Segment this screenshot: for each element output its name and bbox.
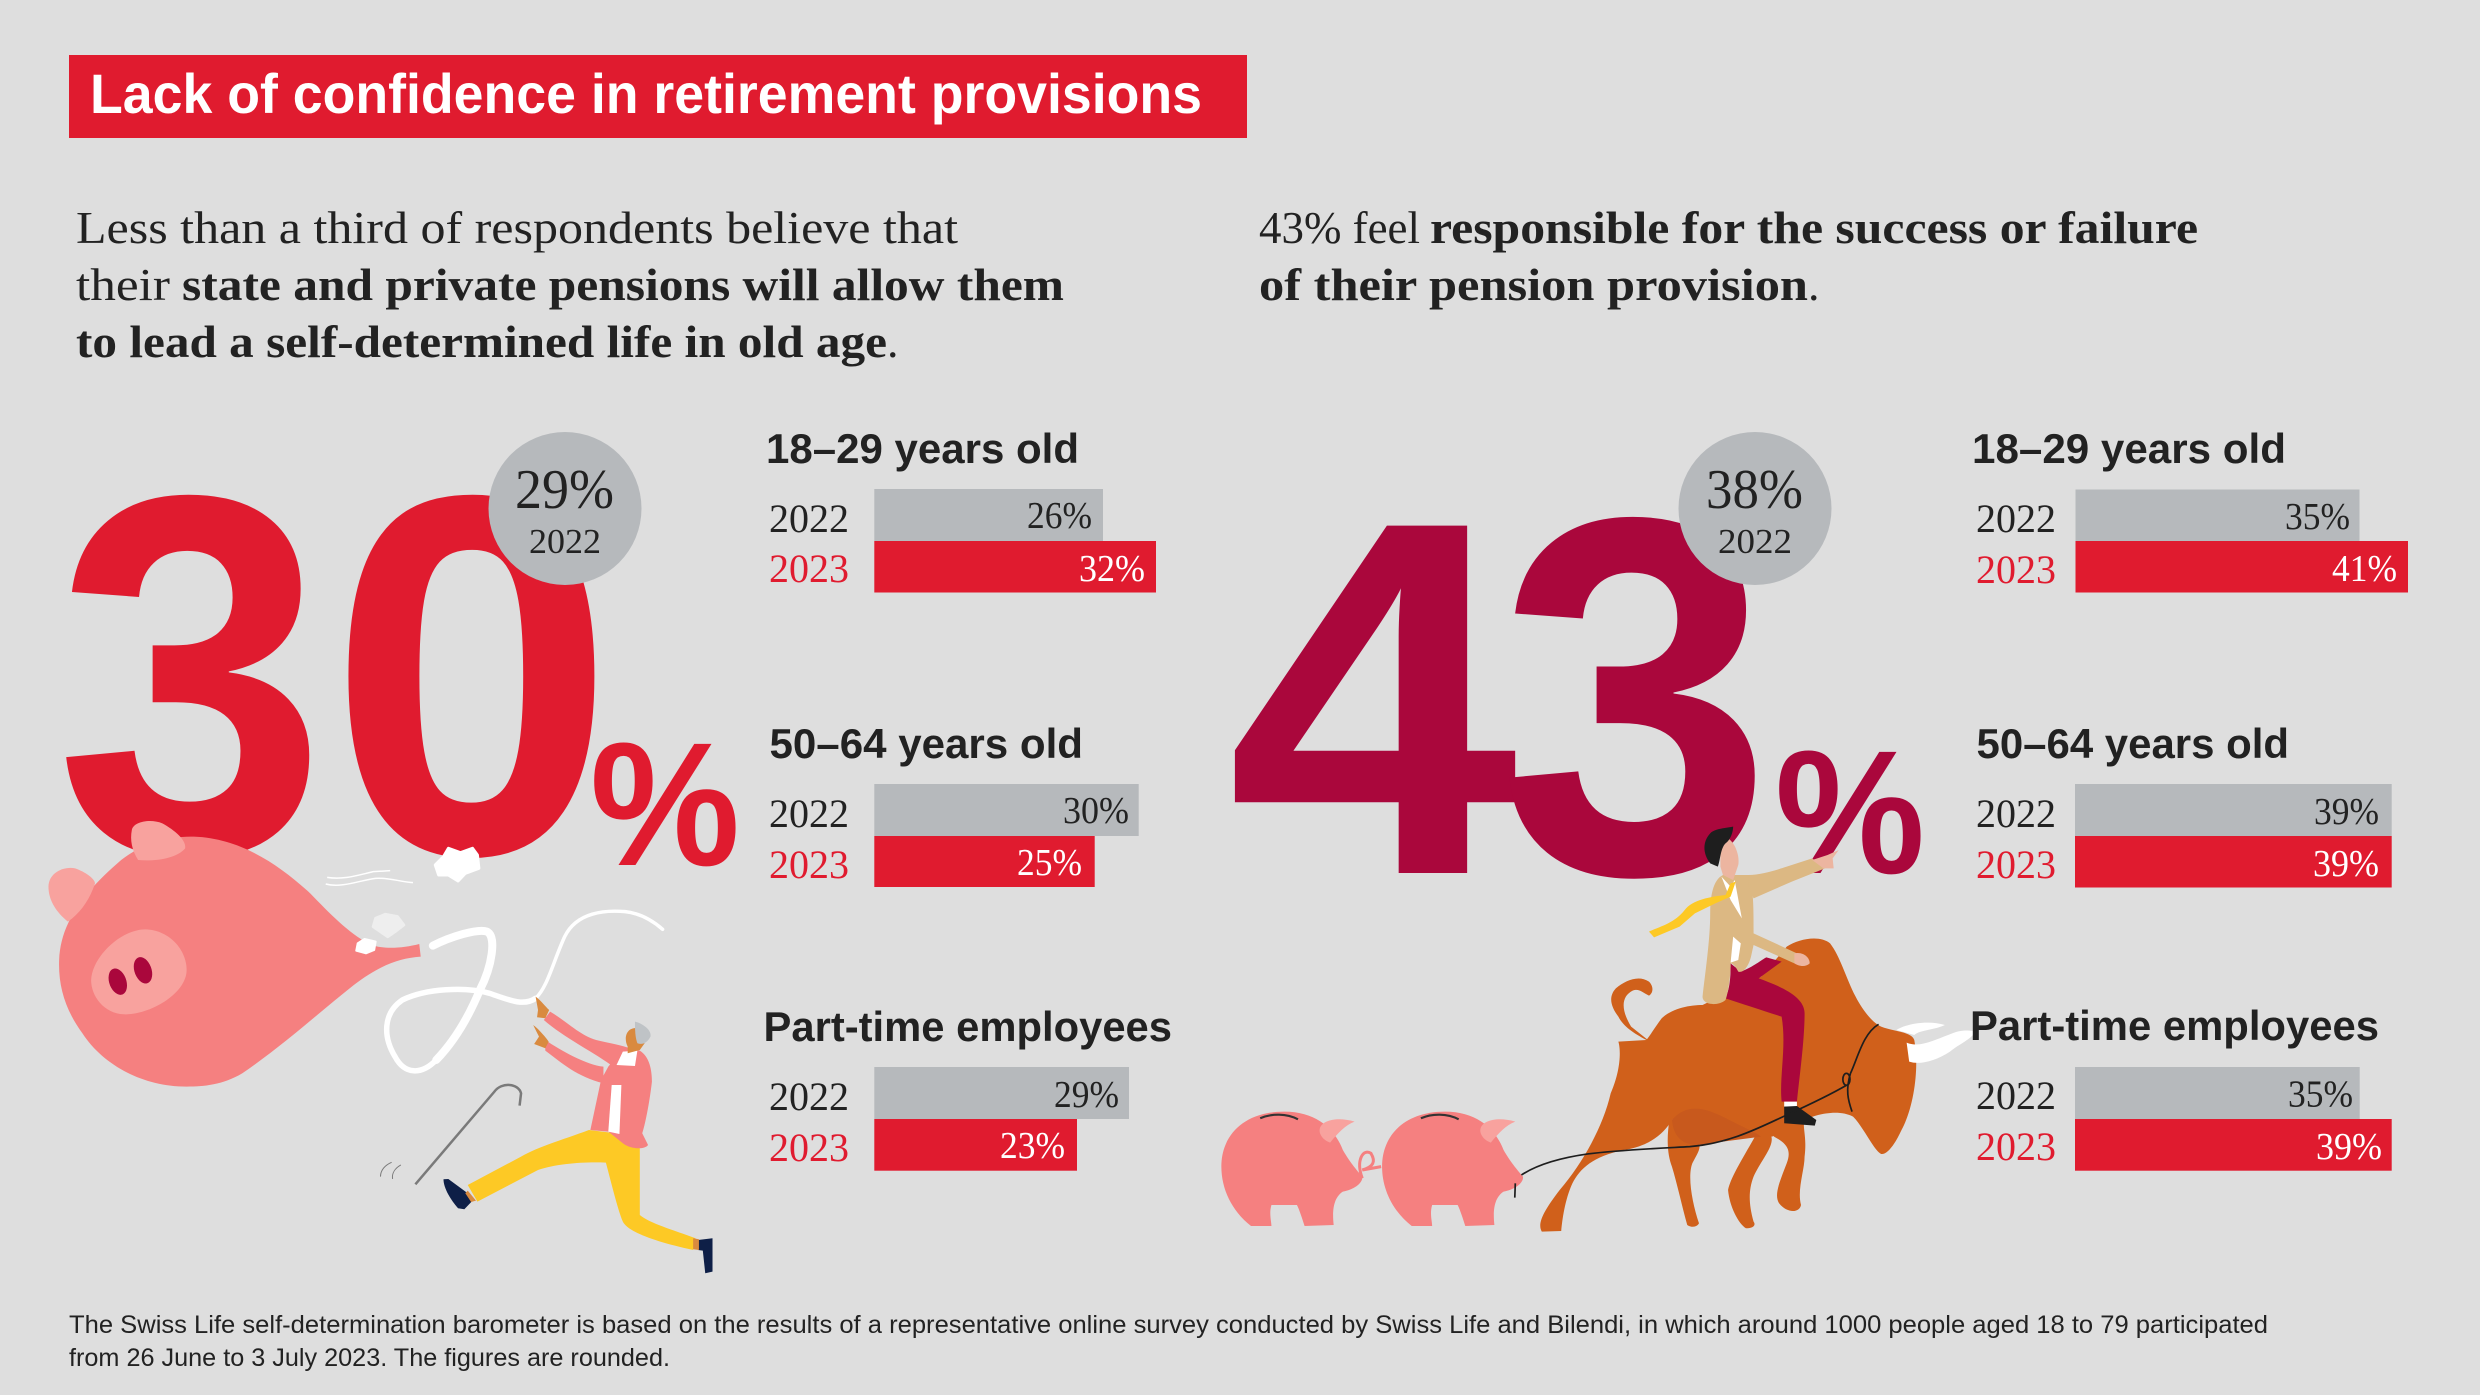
badge: 38% in 2022 bbox=[1678, 432, 1832, 585]
icon: piggy bank two bbox=[1382, 1112, 1523, 1226]
big number: 43%: 4 bbox=[1227, 416, 1521, 980]
chart: part-time employees, left: 2022 bbox=[769, 1074, 849, 1119]
icon: running man bbox=[444, 997, 713, 1273]
big number: 30%: 0 bbox=[328, 390, 616, 963]
big number: 43%: 3 bbox=[1498, 413, 1773, 982]
badge: 29% in 2022: 2022 bbox=[529, 522, 601, 561]
footnote bbox=[69, 1311, 2268, 1372]
icon: air puffs bbox=[326, 848, 479, 953]
chart: 18-29 years old, right: 2022 bbox=[1976, 496, 2056, 541]
text block: right intro statement: responsible for the success or failure bbox=[1430, 202, 2198, 253]
big number: 30%: % bbox=[590, 707, 740, 903]
chart: 50-64 years old, right: 2023 bbox=[1976, 842, 2056, 887]
chart: 50-64 years old, right: 39% bbox=[2314, 791, 2379, 833]
text block: right intro statement: of their pension provision bbox=[1259, 259, 1808, 310]
chart: 18-29 years old, left bbox=[766, 425, 1156, 592]
icon: falling cane bbox=[380, 1085, 521, 1184]
text block: right intro statement: 43% feel bbox=[1259, 202, 1420, 253]
chart: 18-29 years old, right bbox=[1972, 425, 2408, 592]
chart: 50-64 years old, right: 2022 bbox=[1976, 791, 2056, 836]
chart: 18-29 years old, left: 32% bbox=[1079, 548, 1145, 590]
chart: part-time employees, right: 2023 bbox=[1976, 1124, 2056, 1169]
chart: 18-29 years old, left: 26% bbox=[1027, 495, 1092, 537]
chart: part-time employees, right: 2022 bbox=[1976, 1073, 2056, 1118]
text block: left intro statement: state and private pensions will allow them bbox=[182, 259, 1064, 310]
panel: left bar charts bbox=[764, 425, 1172, 1171]
icon: piggy bank one bbox=[1221, 1112, 1381, 1226]
chart: 18-29 years old, right: 35% bbox=[2285, 496, 2350, 538]
chart: 18-29 years old, right: 41% bbox=[2332, 548, 2397, 590]
footnote: from 26 June to 3 July 2023. The figures are rounded. bbox=[69, 1344, 670, 1372]
badge: 38% in 2022: 38% bbox=[1706, 459, 1803, 521]
badge: 38% in 2022: 2022 bbox=[1718, 522, 1792, 561]
chart: 18-29 years old, left: 2023 bbox=[769, 546, 849, 591]
text block: left intro statement: Less than a third of respondents believe that bbox=[76, 202, 958, 253]
chart: 18-29 years old, right: 18–29 years old bbox=[1972, 425, 2286, 472]
footnote: The Swiss Life self-determination barometer is based on the results of a representative online survey conducted by Swiss Life and Bilendi, in which around 1000 people aged 18 to 79 participated bbox=[69, 1311, 2268, 1339]
chart: part-time employees, left: Part-time employees bbox=[764, 1003, 1172, 1050]
big number: 30% bbox=[55, 389, 740, 963]
chart: part-time employees, left bbox=[764, 1003, 1172, 1171]
chart: 18-29 years old, left: 2022 bbox=[769, 496, 849, 541]
chart: 50-64 years old, left: 30% bbox=[1063, 790, 1129, 832]
illustration: man riding bull pulling piggy banks bbox=[1221, 827, 1976, 1232]
chart: 50-64 years old, left bbox=[769, 720, 1139, 887]
title banner: Lack of confidence in retirement provisions bbox=[90, 62, 1202, 125]
icon: bull bbox=[1540, 938, 1976, 1232]
text block: right intro statement: . bbox=[1808, 259, 1820, 310]
chart: 18-29 years old, right: 2023 bbox=[1976, 547, 2056, 592]
chart: 50-64 years old, left: 50–64 years old bbox=[770, 720, 1083, 767]
icon: rope bbox=[1515, 1024, 1879, 1198]
text block: left intro statement: to lead a self-determined life in old age bbox=[76, 316, 887, 367]
text block: left intro statement: . bbox=[887, 316, 898, 367]
big number: 30%: 3 bbox=[55, 389, 327, 963]
chart: 50-64 years old, right: 39% bbox=[2313, 843, 2379, 885]
chart: part-time employees, left: 29% bbox=[1054, 1074, 1119, 1116]
big number: 43% bbox=[1227, 413, 1925, 982]
chart: part-time employees, left: 23% bbox=[1000, 1125, 1065, 1167]
chart: part-time employees, right: 39% bbox=[2316, 1126, 2382, 1168]
text block: right intro statement bbox=[1259, 202, 2198, 310]
icon: rider in suit bbox=[1649, 827, 1839, 1126]
illustration: deflating piggy balloon with running man bbox=[48, 821, 713, 1273]
chart: 18-29 years old, left: 18–29 years old bbox=[766, 425, 1079, 472]
panel: right bar charts bbox=[1970, 425, 2408, 1171]
text block: left intro statement: their bbox=[76, 259, 170, 310]
icon: balloon string bbox=[387, 911, 663, 1071]
chart: 50-64 years old, left: 2023 bbox=[769, 842, 849, 887]
chart: part-time employees, right bbox=[1970, 1002, 2392, 1171]
chart: part-time employees, right: 35% bbox=[2288, 1074, 2353, 1116]
icon: balloon pig bbox=[48, 821, 421, 1087]
chart: 50-64 years old, left: 2022 bbox=[769, 791, 849, 836]
chart: 50-64 years old, left: 25% bbox=[1017, 842, 1082, 884]
chart: part-time employees, left: 2023 bbox=[769, 1125, 849, 1170]
chart: part-time employees, right: Part-time employees bbox=[1970, 1002, 2379, 1049]
big number: 43%: % bbox=[1775, 715, 1925, 911]
text block: left intro statement bbox=[76, 202, 1064, 367]
badge: 29% in 2022: 29% bbox=[515, 459, 614, 521]
chart: 50-64 years old, right: 50–64 years old bbox=[1976, 720, 2289, 767]
badge: 29% in 2022 bbox=[488, 432, 642, 585]
chart: 50-64 years old, right bbox=[1976, 720, 2392, 888]
